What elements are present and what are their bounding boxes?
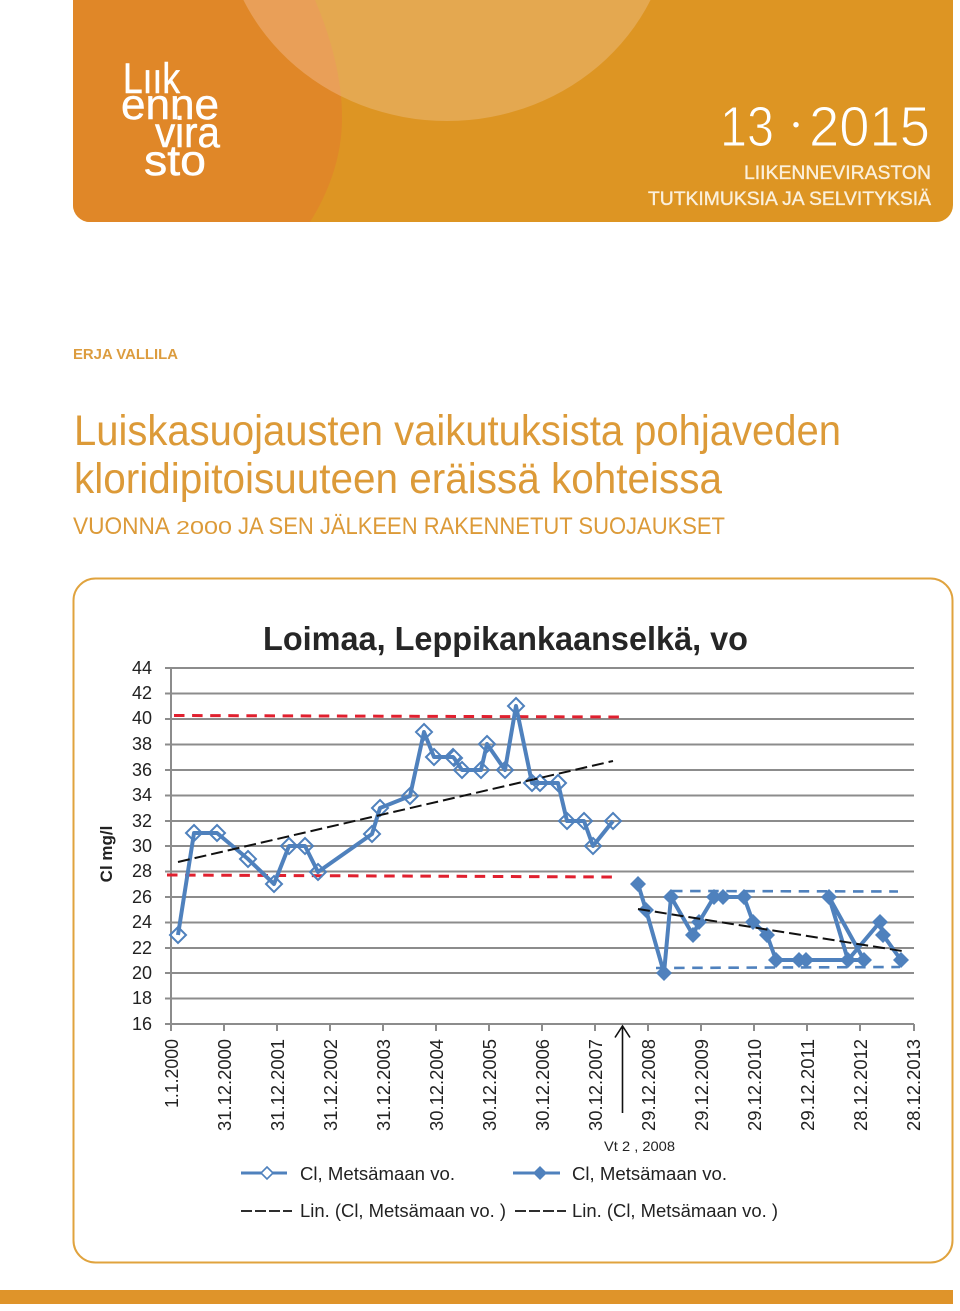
x axis date labels: 31.12.2001 xyxy=(268,1039,288,1131)
series name xyxy=(648,163,931,210)
y axis labels: 34 xyxy=(132,785,152,805)
y axis labels: 28 xyxy=(132,861,152,881)
x axis date labels: 31.12.2000 xyxy=(215,1039,235,1131)
issue number: 13 xyxy=(720,95,774,159)
legend item: trend 1: Lin. (Cl, Metsämaan vo. ) xyxy=(300,1201,506,1221)
legend item: trend 2: Lin. (Cl, Metsämaan vo. ) xyxy=(572,1201,778,1221)
series 2 trend line xyxy=(638,909,902,951)
logo: Liikennevirasto: Lıık xyxy=(123,55,180,103)
x axis date labels: 28.12.2012 xyxy=(851,1039,871,1131)
main title: kloridipitoisuuteen eräissä kohteissa xyxy=(74,455,722,503)
legend item: series 1: Cl, Metsämaan vo. xyxy=(300,1164,455,1184)
red limit lines xyxy=(167,716,620,877)
y axis labels: 44 xyxy=(132,658,152,678)
issue number: • xyxy=(792,114,800,136)
cover header band xyxy=(73,0,953,222)
series 1 hollow markers xyxy=(170,698,621,943)
annotation: Vt 2, 2008: Vt 2 , 2008 xyxy=(604,1138,675,1154)
x axis date labels: 29.12.2008 xyxy=(639,1039,659,1131)
y axis labels: 38 xyxy=(132,734,152,754)
y axis labels: 32 xyxy=(132,811,152,831)
subtitle: 2000 xyxy=(176,518,232,538)
logo: Liikennevirasto xyxy=(121,55,220,185)
blue limit lines xyxy=(656,891,900,968)
main title: Luiskasuojausten vaikutuksista pohjaveden xyxy=(74,407,841,455)
subtitle xyxy=(73,513,725,540)
y axis title: Cl mg/l xyxy=(97,826,116,882)
arrow: Vt 2 2008 marker xyxy=(615,1026,630,1113)
subtitle: JA SEN JÄLKEEN RAKENNETUT SUOJAUKSET xyxy=(238,513,725,540)
y axis labels: 22 xyxy=(132,938,152,958)
x axis date labels: 30.12.2004 xyxy=(427,1039,447,1131)
x axis date labels: 30.12.2007 xyxy=(586,1039,606,1131)
logo: Liikennevirasto: vira xyxy=(155,109,220,157)
author: ERJA VALLILA xyxy=(73,346,178,363)
y axis labels: 16 xyxy=(132,1014,152,1034)
subtitle: VUONNA xyxy=(73,513,170,540)
series 1 line xyxy=(178,706,613,935)
x axis date labels: 29.12.2011 xyxy=(798,1039,818,1131)
y axis labels: 18 xyxy=(132,988,152,1008)
y axis labels: 42 xyxy=(132,683,152,703)
y axis labels: 36 xyxy=(132,760,152,780)
main title xyxy=(74,407,841,503)
series 2 line xyxy=(638,884,901,973)
x axis date labels: 30.12.2005 xyxy=(480,1039,500,1131)
y axis labels: 26 xyxy=(132,887,152,907)
x axis date labels: 29.12.2009 xyxy=(692,1039,712,1131)
x axis date labels: 29.12.2010 xyxy=(745,1039,765,1131)
x axis date labels: 30.12.2006 xyxy=(533,1039,553,1131)
y axis labels: 40 xyxy=(132,708,152,728)
legend item: series 2: Cl, Metsämaan vo. xyxy=(572,1164,727,1184)
y axis labels xyxy=(132,658,152,1034)
x axis date labels: 28.12.2013 xyxy=(904,1039,924,1131)
series 2 filled markers xyxy=(630,876,909,981)
panel: chart frame xyxy=(74,578,952,1262)
grid and axes xyxy=(165,668,914,1031)
legend xyxy=(241,1164,778,1221)
x axis date labels: 31.12.2002 xyxy=(321,1039,341,1131)
chart: chloride time series xyxy=(132,658,924,1131)
y axis labels: 20 xyxy=(132,963,152,983)
bottom band xyxy=(0,1290,953,1304)
y axis labels: 30 xyxy=(132,836,152,856)
x axis date labels: 31.12.2003 xyxy=(374,1039,394,1131)
issue number xyxy=(720,95,930,159)
logo: Liikennevirasto: sto xyxy=(144,137,206,185)
issue number: 2015 xyxy=(809,95,930,159)
y axis labels: 24 xyxy=(132,912,152,932)
series name: TUTKIMUKSIA JA SELVITYKSIÄ xyxy=(648,189,931,210)
series 1 trend line xyxy=(178,761,613,862)
x axis date labels xyxy=(162,1039,924,1131)
x axis date labels: 1.1.2000 xyxy=(162,1039,182,1108)
logo: Liikennevirasto: enne xyxy=(121,81,219,129)
chart title: Loimaa, Leppikankaanselkä, vo xyxy=(263,620,748,657)
series name: LIIKENNEVIRASTON xyxy=(744,163,931,184)
